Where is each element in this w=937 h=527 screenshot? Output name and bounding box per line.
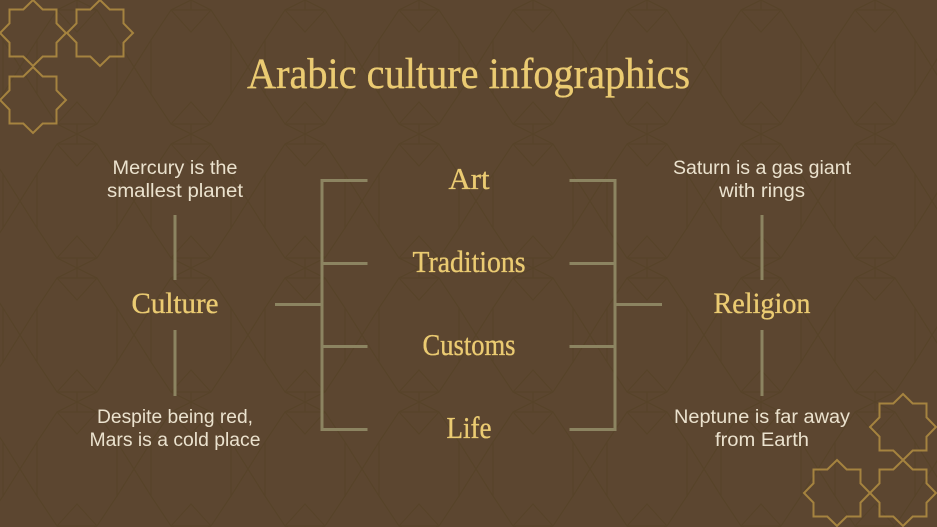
center label: Traditions: Traditions xyxy=(412,244,526,279)
connector: Saturn to Religion xyxy=(760,215,764,280)
text block: Mercury xyxy=(107,158,244,202)
text block: Mars: Despite being red, xyxy=(97,407,253,428)
text block: Neptune: from Earth xyxy=(715,430,809,451)
text block: Neptune xyxy=(674,407,851,451)
text block: Mercury: smallest planet xyxy=(107,181,244,202)
right bracket xyxy=(570,179,662,431)
connector: Religion to Neptune xyxy=(760,330,764,396)
heading: Religion: Religion xyxy=(714,287,810,320)
decorative stars: top left xyxy=(0,0,133,133)
left bracket xyxy=(275,179,368,431)
text block: Neptune: Neptune is far away xyxy=(674,407,851,428)
text block: Mercury: Mercury is the xyxy=(112,158,238,179)
text block: Mars: Mars is a cold place xyxy=(90,430,260,451)
text block: Saturn xyxy=(673,158,852,202)
connector: Culture to Mars xyxy=(174,330,176,396)
text block: Saturn: with rings xyxy=(718,181,805,202)
decorative stars: bottom right xyxy=(804,394,936,526)
connector: Mercury to Culture xyxy=(174,215,176,280)
title: Arabic culture infographics xyxy=(247,51,690,98)
text block: Saturn: Saturn is a gas giant xyxy=(673,158,852,179)
heading: Culture: Culture xyxy=(132,287,218,320)
text block: Mars xyxy=(90,407,260,451)
center label: Customs: Customs xyxy=(422,327,516,362)
center label: Life: Life xyxy=(446,410,492,445)
center label: Art: Art xyxy=(448,161,490,196)
